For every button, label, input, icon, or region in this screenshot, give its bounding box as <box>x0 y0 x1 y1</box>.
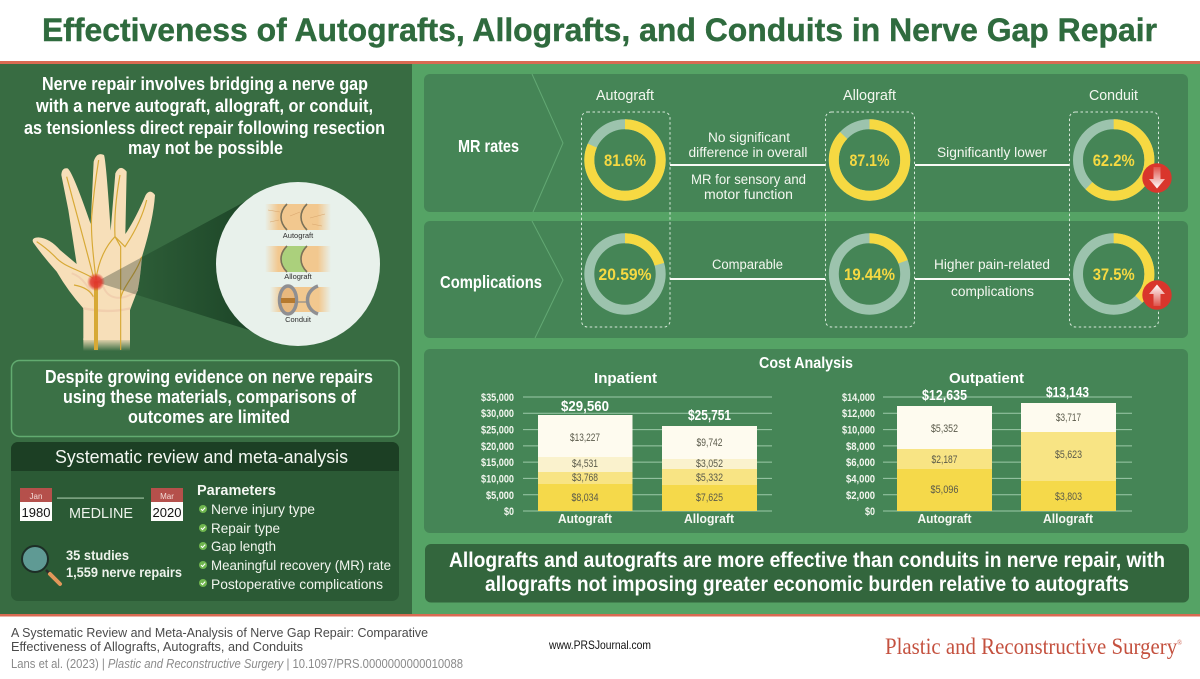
donut: allograft MR 87.1% <box>834 124 905 196</box>
column headings: Autograft <box>596 88 654 104</box>
bar: outpatient autograft: $5,352 <box>931 423 958 435</box>
column headings: Allograft <box>843 88 896 104</box>
study counts: 35 studies <box>66 548 129 563</box>
connector lines <box>670 164 1069 280</box>
icon: down arrow badge <box>1142 163 1172 193</box>
bar: outpatient autograft: $2,187 <box>932 454 958 466</box>
donut: allograft complications 19.44% <box>834 238 905 310</box>
intro text: as tensionless direct repair following resection <box>24 118 385 138</box>
chart: inpatient cost: $0 <box>504 506 514 518</box>
bar: inpatient autograft: $8,034 <box>572 492 598 504</box>
comparison text: allograft vs conduit complications: complications <box>951 284 1034 299</box>
chart: outpatient cost: $12,000 <box>842 408 875 420</box>
icon: magnifying glass <box>22 546 60 584</box>
chart: inpatient cost: $30,000 <box>481 408 514 420</box>
autograft diagram: Autograft <box>283 231 314 240</box>
chart: inpatient cost: $10,000 <box>481 474 514 486</box>
comparison text: allograft vs conduit MR: Significantly lower <box>937 145 1048 160</box>
chart: outpatient cost <box>842 370 1132 526</box>
donut: autograft complications 20.59% <box>589 238 661 310</box>
bar: outpatient allograft: $5,623 <box>1055 449 1082 461</box>
bar: outpatient autograft: $12,635 <box>922 387 967 404</box>
bar: outpatient allograft: $3,717 <box>1056 412 1081 424</box>
chart: inpatient cost: Inpatient <box>594 370 657 387</box>
citation: Lans et al. (2023) | Plastic and Reconstructive Surgery | 10.1097/PRS.0000000000010088 <box>11 656 463 671</box>
bar: outpatient allograft: $13,143 <box>1046 384 1089 401</box>
comparison text: autograft vs allograft MR: MR for sensory and <box>691 172 806 187</box>
conduit diagram <box>270 286 331 324</box>
panel: systematic review <box>11 442 399 601</box>
donut: autograft MR 81.6%: 81.6% <box>604 151 646 170</box>
citation: A Systematic Review and Meta-Analysis of Nerve Gap Repair: Comparative <box>11 625 428 640</box>
donut: allograft MR 87.1%: 87.1% <box>850 151 890 170</box>
website: www.PRSJournal.com <box>548 638 651 652</box>
intro text: with a nerve autograft, allograft, or conduit, <box>35 96 373 116</box>
allograft diagram <box>265 246 331 281</box>
intro text: Nerve repair involves bridging a nerve gap <box>42 74 368 94</box>
panel: cost analysis: Cost Analysis <box>759 355 853 372</box>
calendar: Mar 2020 <box>151 488 183 521</box>
hand illustration <box>32 154 155 350</box>
chart: inpatient cost <box>481 370 772 526</box>
chart: inpatient cost: $15,000 <box>481 457 514 469</box>
allograft diagram: Allograft <box>284 272 313 281</box>
donut: allograft complications 19.44%: 19.44% <box>844 265 895 284</box>
bottom accent line <box>0 614 1200 616</box>
bar: inpatient allograft: $9,742 <box>696 437 722 449</box>
panel: MR rates <box>424 74 1188 212</box>
comparison text: autograft vs allograft MR: motor function <box>704 187 793 202</box>
conduit diagram: Conduit <box>285 315 312 324</box>
callout: limited comparisons: Despite growing evidence on nerve repairs <box>45 367 373 387</box>
injury spot <box>87 273 105 291</box>
comparison text: allograft vs conduit complications: Higher pain-related <box>934 257 1050 272</box>
panel heading: Systematic review and meta-analysis <box>55 446 348 467</box>
callout: limited comparisons <box>12 360 399 436</box>
chart: outpatient cost: $14,000 <box>842 392 875 404</box>
bar: outpatient allograft: Allograft <box>1043 511 1094 526</box>
bar: inpatient autograft <box>538 398 632 526</box>
cone overlay on hand <box>100 257 142 294</box>
zoom cone <box>96 201 252 331</box>
database label: MEDLINE <box>69 505 133 522</box>
donut: autograft complications 20.59%: 20.59% <box>598 265 652 284</box>
bar: outpatient autograft: $5,096 <box>930 484 958 496</box>
conclusion banner <box>425 544 1189 602</box>
journal logo: Plastic and Reconstructive Surgery <box>885 634 1200 659</box>
conclusion banner: allografts not imposing greater economic burden relative to autografts <box>485 573 1129 596</box>
chart: outpatient cost: $4,000 <box>846 474 875 486</box>
calendar: Mar 2020: Mar <box>160 492 174 501</box>
bar: outpatient allograft: $3,803 <box>1055 491 1082 503</box>
chart: inpatient cost: $20,000 <box>481 441 514 453</box>
panel: complications: Complications <box>440 272 542 292</box>
calendar: Jan 1980 <box>20 488 52 521</box>
comparison text: autograft vs allograft MR: No significant <box>708 130 790 145</box>
panel: left background <box>0 62 412 615</box>
panel header <box>11 442 399 471</box>
bar: inpatient allograft: Allograft <box>684 511 735 526</box>
bar: inpatient autograft: $3,768 <box>572 472 598 484</box>
title: Effectiveness of Autografts, Allografts, and Conduits in Nerve Gap Repair <box>42 12 1157 48</box>
bar: inpatient allograft: $25,751 <box>688 407 731 424</box>
chart: outpatient cost: $2,000 <box>846 490 875 502</box>
parameters list <box>199 501 391 592</box>
journal logo: ® <box>1177 639 1183 647</box>
panel: MR rates: MR rates <box>458 136 519 156</box>
parameters heading: Parameters <box>197 482 276 499</box>
panel: complications <box>424 221 1188 338</box>
study counts <box>66 548 182 580</box>
magnified circle with graft types <box>216 182 380 346</box>
chart: inpatient cost: $35,000 <box>481 392 514 404</box>
bar: outpatient autograft: Autograft <box>918 511 972 526</box>
bar: inpatient autograft: $29,560 <box>561 398 609 415</box>
icon: up arrow badge <box>1142 280 1172 310</box>
bar: inpatient allograft: $3,052 <box>696 458 723 470</box>
panel: right background <box>412 62 1200 615</box>
bar: inpatient allograft: $7,625 <box>696 492 723 504</box>
bar: inpatient autograft: $4,531 <box>572 458 598 470</box>
column headings <box>596 88 1138 104</box>
chart: outpatient cost: $8,000 <box>846 441 875 453</box>
autograft diagram <box>265 204 331 240</box>
bar: outpatient autograft <box>897 387 992 526</box>
donut: conduit MR 62.2%: 62.2% <box>1093 151 1135 170</box>
citation: Effectiveness of Allografts, Autografts, and Conduits <box>11 639 303 654</box>
callout: limited comparisons: outcomes are limited <box>128 407 290 427</box>
comparison text: autograft vs allograft MR <box>688 130 808 202</box>
bar: outpatient allograft <box>1021 384 1116 526</box>
bar: inpatient autograft: Autograft <box>558 511 613 526</box>
intro text <box>24 74 385 158</box>
date range line <box>57 498 144 499</box>
study counts: 1,559 nerve repairs <box>66 565 182 580</box>
parameters list: Nerve injury type <box>211 501 315 517</box>
bar: inpatient allograft: $5,332 <box>696 472 723 484</box>
comparison text: autograft vs allograft MR: difference in overall <box>688 145 808 160</box>
dashed group outlines <box>582 112 1158 327</box>
comparison text: autograft vs allograft complications: Comparable <box>712 257 783 272</box>
parameters list: Repair type <box>211 520 280 536</box>
citation <box>11 625 463 671</box>
parameters list: Postoperative complications <box>211 576 383 592</box>
chart: outpatient cost: $0 <box>865 506 875 518</box>
panel: cost analysis <box>424 349 1188 533</box>
chart: outpatient cost: Outpatient <box>949 370 1024 387</box>
calendar: Mar 2020: 2020 <box>153 505 181 520</box>
chart: inpatient cost: $5,000 <box>486 490 514 502</box>
chart: outpatient cost: $6,000 <box>846 457 875 469</box>
chart: outpatient cost: $10,000 <box>842 424 875 436</box>
chart: inpatient cost: $25,000 <box>481 424 514 436</box>
intro text: may not be possible <box>128 138 283 158</box>
donut: conduit complications 37.5%: 37.5% <box>1093 265 1135 284</box>
column headings: Conduit <box>1089 88 1138 104</box>
callout: limited comparisons: using these materials, comparisons of <box>63 387 357 407</box>
parameters list: Meaningful recovery (MR) rate <box>211 557 391 573</box>
parameters list: Gap length <box>211 538 276 554</box>
top accent line <box>0 61 1200 64</box>
calendar: Jan 1980: 1980 <box>22 505 50 520</box>
calendar: Jan 1980: Jan <box>30 492 42 501</box>
donut: autograft MR 81.6% <box>589 124 661 196</box>
bar: inpatient autograft: $13,227 <box>570 432 600 444</box>
comparison text: allograft vs conduit complications <box>934 257 1050 299</box>
donut: conduit complications 37.5% <box>1078 238 1149 310</box>
bar: inpatient allograft <box>662 407 757 526</box>
donut: conduit MR 62.2% <box>1078 124 1149 196</box>
